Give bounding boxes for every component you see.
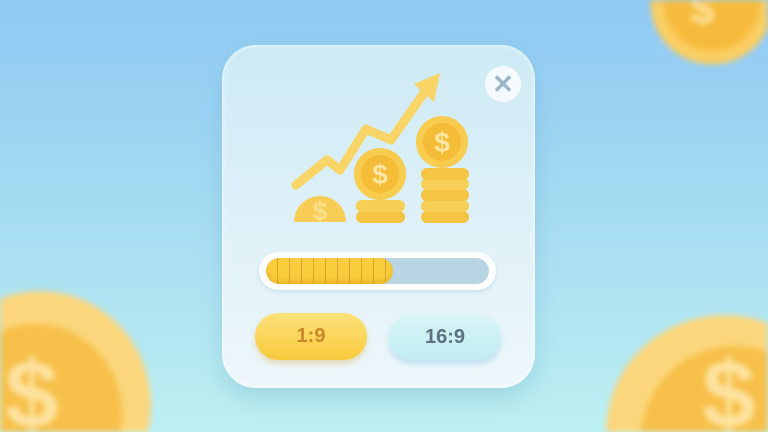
arrow [296, 73, 440, 185]
coin: half: $ [313, 196, 328, 226]
chart: growth arrow with coin stacks [292, 73, 469, 226]
coin stack: right: $ [434, 127, 450, 158]
button: 16:9: 16:9 [425, 326, 465, 348]
panel: main card [222, 45, 535, 388]
coin: half [294, 196, 346, 226]
coin stack: middle [354, 148, 406, 223]
icon: close button [485, 66, 521, 102]
button: 1:9: 1:9 [297, 325, 325, 347]
button: 16:9 [389, 315, 501, 360]
coin stack: right [416, 116, 469, 223]
progress bar [259, 252, 496, 290]
icon: close button: ✕ [492, 69, 514, 99]
button: 1:9 [255, 313, 367, 360]
coin stack: middle: $ [372, 159, 388, 190]
